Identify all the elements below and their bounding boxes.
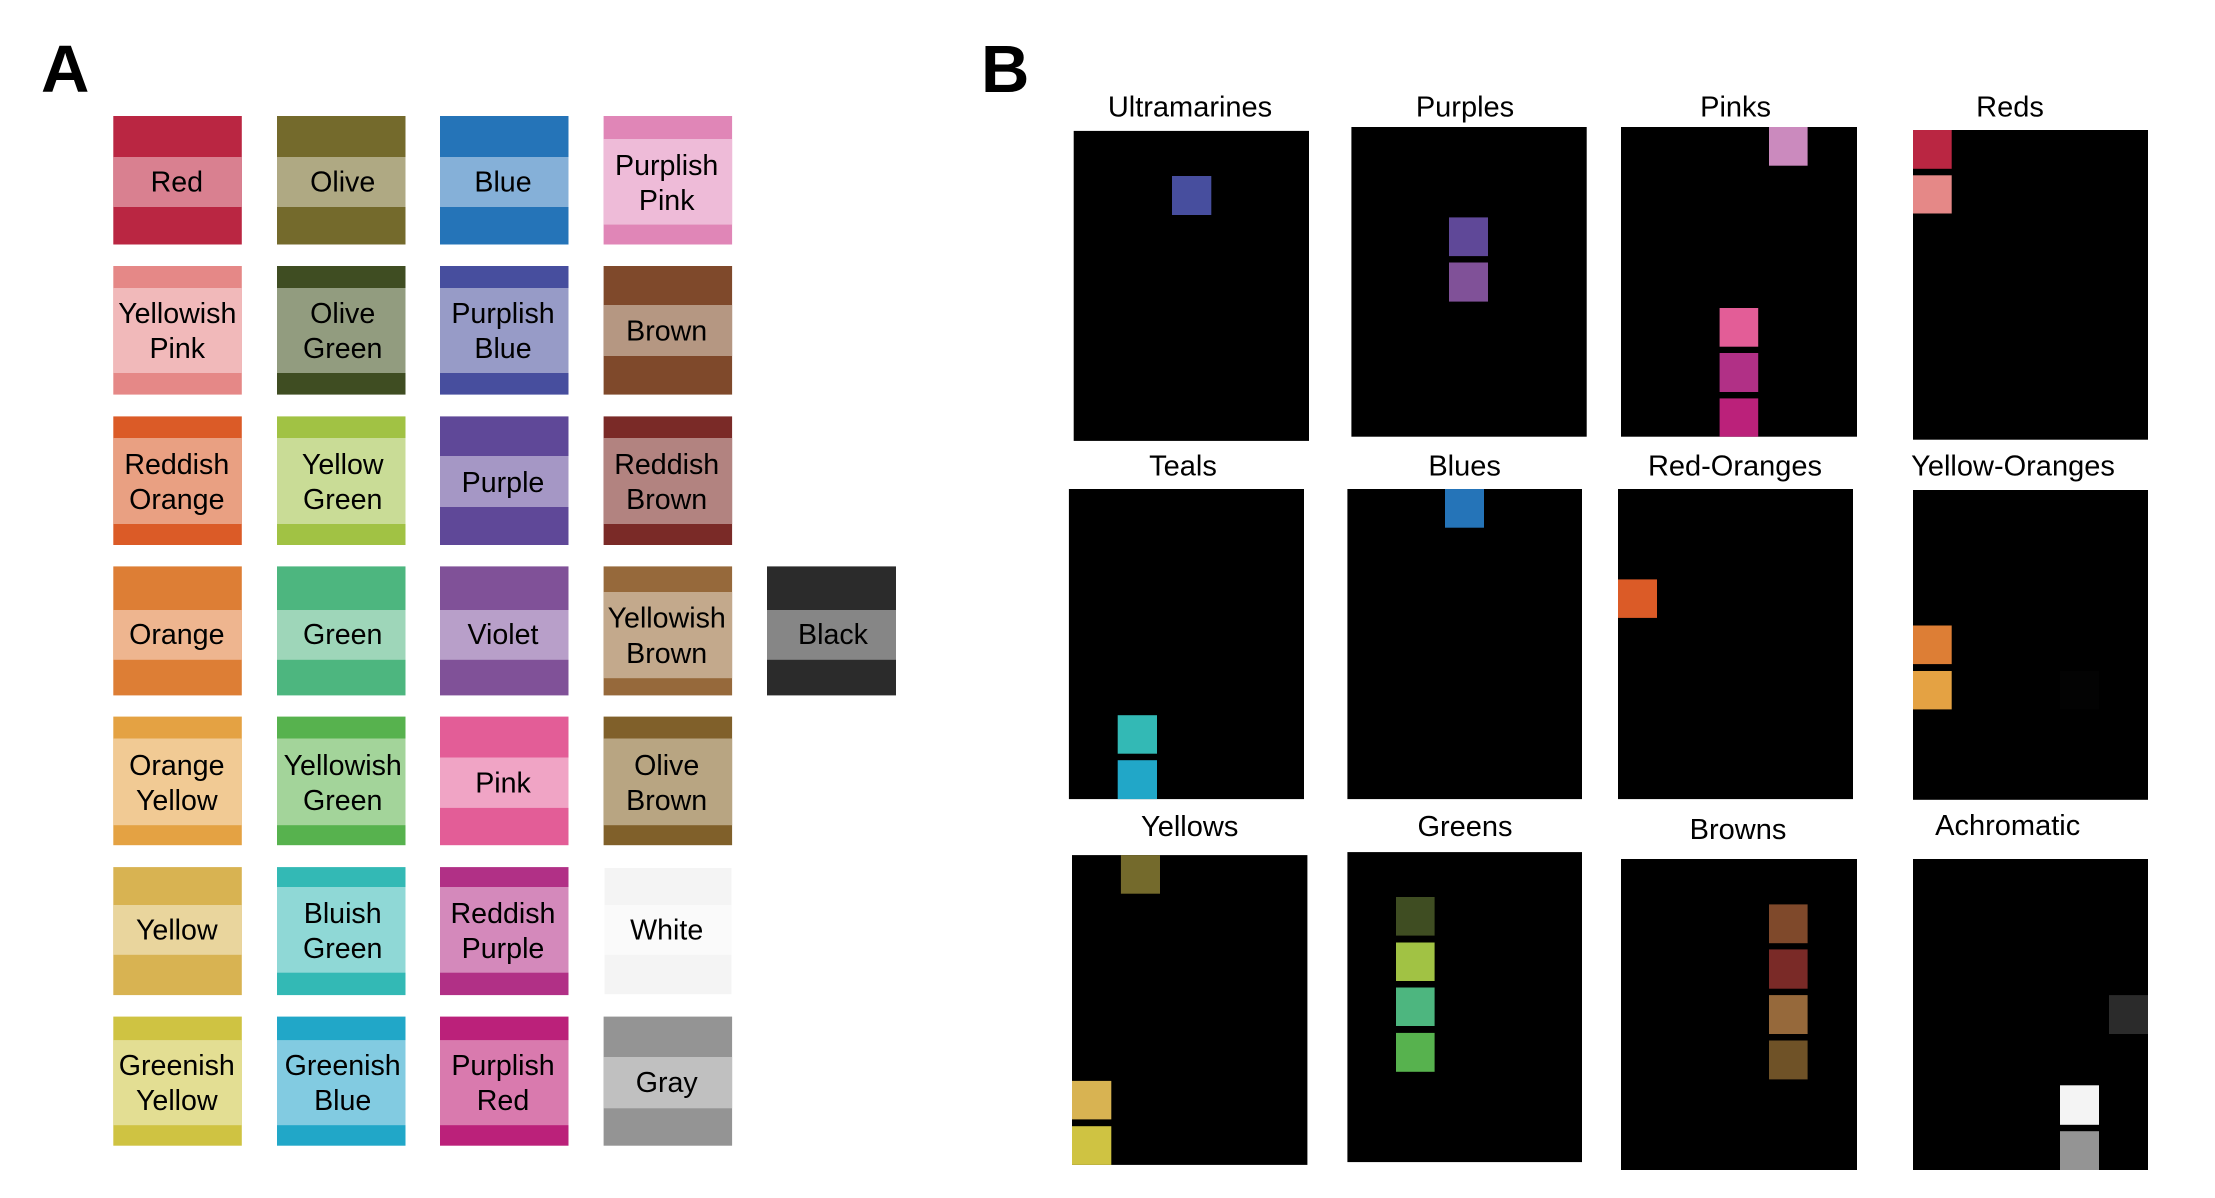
swatch: Orange	[113, 566, 242, 695]
swatch: Purplish Blue: Blue	[474, 333, 532, 365]
swatch: Purple	[440, 416, 568, 545]
group: Blues	[1347, 451, 1582, 799]
panel A: color name swatches	[113, 116, 896, 1146]
swatch: Orange Yellow: Orange	[129, 750, 224, 782]
swatch: Green	[277, 566, 406, 695]
group: Achromatic	[1913, 810, 2148, 1170]
group: Purples	[1351, 92, 1587, 437]
swatch: Pink: Pink	[475, 767, 532, 799]
swatch: Olive Brown	[604, 717, 732, 845]
swatch: Red: Red	[151, 166, 203, 198]
swatch: White: White	[630, 914, 703, 946]
group: Blues: Blues	[1428, 451, 1501, 483]
swatch: Reddish Purple: Purple	[462, 933, 544, 965]
swatch: Purplish Blue: Purplish	[451, 298, 555, 330]
swatch: Yellowish Brown: Brown	[626, 638, 707, 670]
swatch: Reddish Brown	[604, 416, 732, 545]
swatch: Green: Green	[303, 619, 382, 651]
group: Ultramarines: Ultramarines	[1108, 92, 1272, 124]
swatch: Greenish Yellow	[113, 1017, 242, 1146]
swatch: Yellowish Brown	[604, 566, 732, 695]
swatch: Yellow	[113, 867, 242, 995]
group: Pinks: Pinks	[1700, 92, 1771, 124]
group: Teals	[1069, 451, 1304, 799]
swatch: Yellowish Brown: Yellowish	[608, 602, 726, 634]
swatch: Bluish Green	[277, 867, 406, 995]
swatch: Olive: Olive	[310, 166, 375, 198]
swatch: Yellow: Yellow	[136, 914, 218, 946]
group: Red-Oranges: Red-Oranges	[1648, 451, 1822, 483]
swatch: Blue	[440, 116, 568, 244]
swatch: Bluish Green: Bluish	[304, 898, 382, 930]
swatch: Greenish Blue: Greenish	[285, 1050, 401, 1082]
group: Red-Oranges	[1618, 451, 1853, 799]
swatch: Purplish Red: Purplish	[451, 1050, 555, 1082]
group: Yellows: Yellows	[1141, 811, 1238, 843]
swatch: Greenish Blue: Blue	[314, 1085, 371, 1117]
group: Reds: Reds	[1976, 92, 2044, 124]
swatch: Orange Yellow: Yellow	[136, 785, 218, 817]
swatch: Blue: Blue	[474, 166, 532, 198]
swatch: White	[604, 868, 732, 994]
swatch: Yellow Green	[277, 416, 406, 545]
panel B: color groups	[1069, 92, 2148, 1170]
swatch: Red	[113, 116, 242, 244]
swatch: Olive Brown: Olive	[634, 750, 699, 782]
swatch: Olive Green: Green	[303, 333, 382, 365]
swatch: Purplish Red	[440, 1017, 568, 1146]
swatch: Orange: Orange	[129, 619, 224, 651]
swatch: Yellowish Pink	[113, 266, 242, 395]
swatch: Black	[767, 566, 896, 695]
swatch: Purple: Purple	[462, 467, 544, 499]
group: Reds	[1913, 92, 2148, 440]
swatch: Gray	[604, 1017, 732, 1146]
swatch: Orange Yellow	[113, 717, 242, 845]
swatch: Greenish Yellow: Yellow	[136, 1085, 218, 1117]
swatch: Gray: Gray	[636, 1067, 698, 1099]
swatch: Black: Black	[798, 619, 869, 651]
swatch: Greenish Yellow: Greenish	[119, 1050, 235, 1082]
group: Ultramarines	[1074, 92, 1309, 441]
group: Greens	[1347, 811, 1582, 1162]
group: Browns: Browns	[1690, 814, 1786, 846]
swatch: Purplish Pink: Purplish	[615, 150, 718, 182]
swatch: Olive Green: Olive	[310, 298, 375, 330]
swatch: Reddish Orange	[113, 416, 242, 545]
swatch: Violet	[440, 566, 568, 695]
group: Achromatic: Achromatic	[1935, 810, 2080, 842]
group: Browns	[1621, 814, 1857, 1170]
group: Yellow-Oranges	[1911, 451, 2148, 800]
swatch: Reddish Brown: Reddish	[614, 449, 719, 481]
swatch: Purplish Red: Red	[477, 1085, 529, 1117]
swatch: Bluish Green: Green	[303, 933, 382, 965]
swatch: Brown	[604, 266, 732, 395]
swatch: Brown: Brown	[626, 316, 707, 348]
swatch: Olive Brown: Brown	[626, 785, 707, 817]
swatch: Olive Green	[277, 266, 406, 395]
group: Purples: Purples	[1416, 92, 1514, 124]
swatch: Reddish Brown: Brown	[626, 484, 707, 516]
panel label: B: B	[981, 32, 1029, 107]
swatch: Yellow Green: Yellow	[302, 449, 384, 481]
swatch: Purplish Pink: Pink	[639, 185, 695, 217]
group: Yellow-Oranges: Yellow-Oranges	[1911, 451, 2115, 483]
group: Teals: Teals	[1149, 451, 1217, 483]
panel label: A: A	[41, 32, 89, 107]
swatch: Olive	[277, 116, 406, 244]
swatch: Yellowish Pink: Yellowish	[118, 298, 236, 330]
swatch: Yellow Green: Green	[303, 484, 382, 516]
swatch: Greenish Blue	[277, 1017, 406, 1146]
swatch: Yellowish Green: Green	[303, 785, 382, 817]
swatch: Yellowish Pink: Pink	[149, 333, 206, 365]
swatch: Pink	[440, 717, 568, 845]
swatch: Reddish Orange: Reddish	[124, 449, 229, 481]
group: Yellows	[1072, 811, 1307, 1165]
group: Pinks	[1621, 92, 1857, 437]
swatch: Violet: Violet	[467, 619, 539, 651]
swatch: Yellowish Green	[277, 717, 406, 845]
swatch: Purplish Blue	[440, 266, 568, 395]
swatch: Yellowish Green: Yellowish	[284, 750, 402, 782]
swatch: Purplish Pink	[604, 116, 732, 244]
group: Greens: Greens	[1417, 811, 1513, 843]
swatch: Reddish Purple: Reddish	[451, 898, 555, 930]
swatch: Reddish Orange: Orange	[129, 484, 224, 516]
swatch: Reddish Purple	[440, 867, 568, 995]
